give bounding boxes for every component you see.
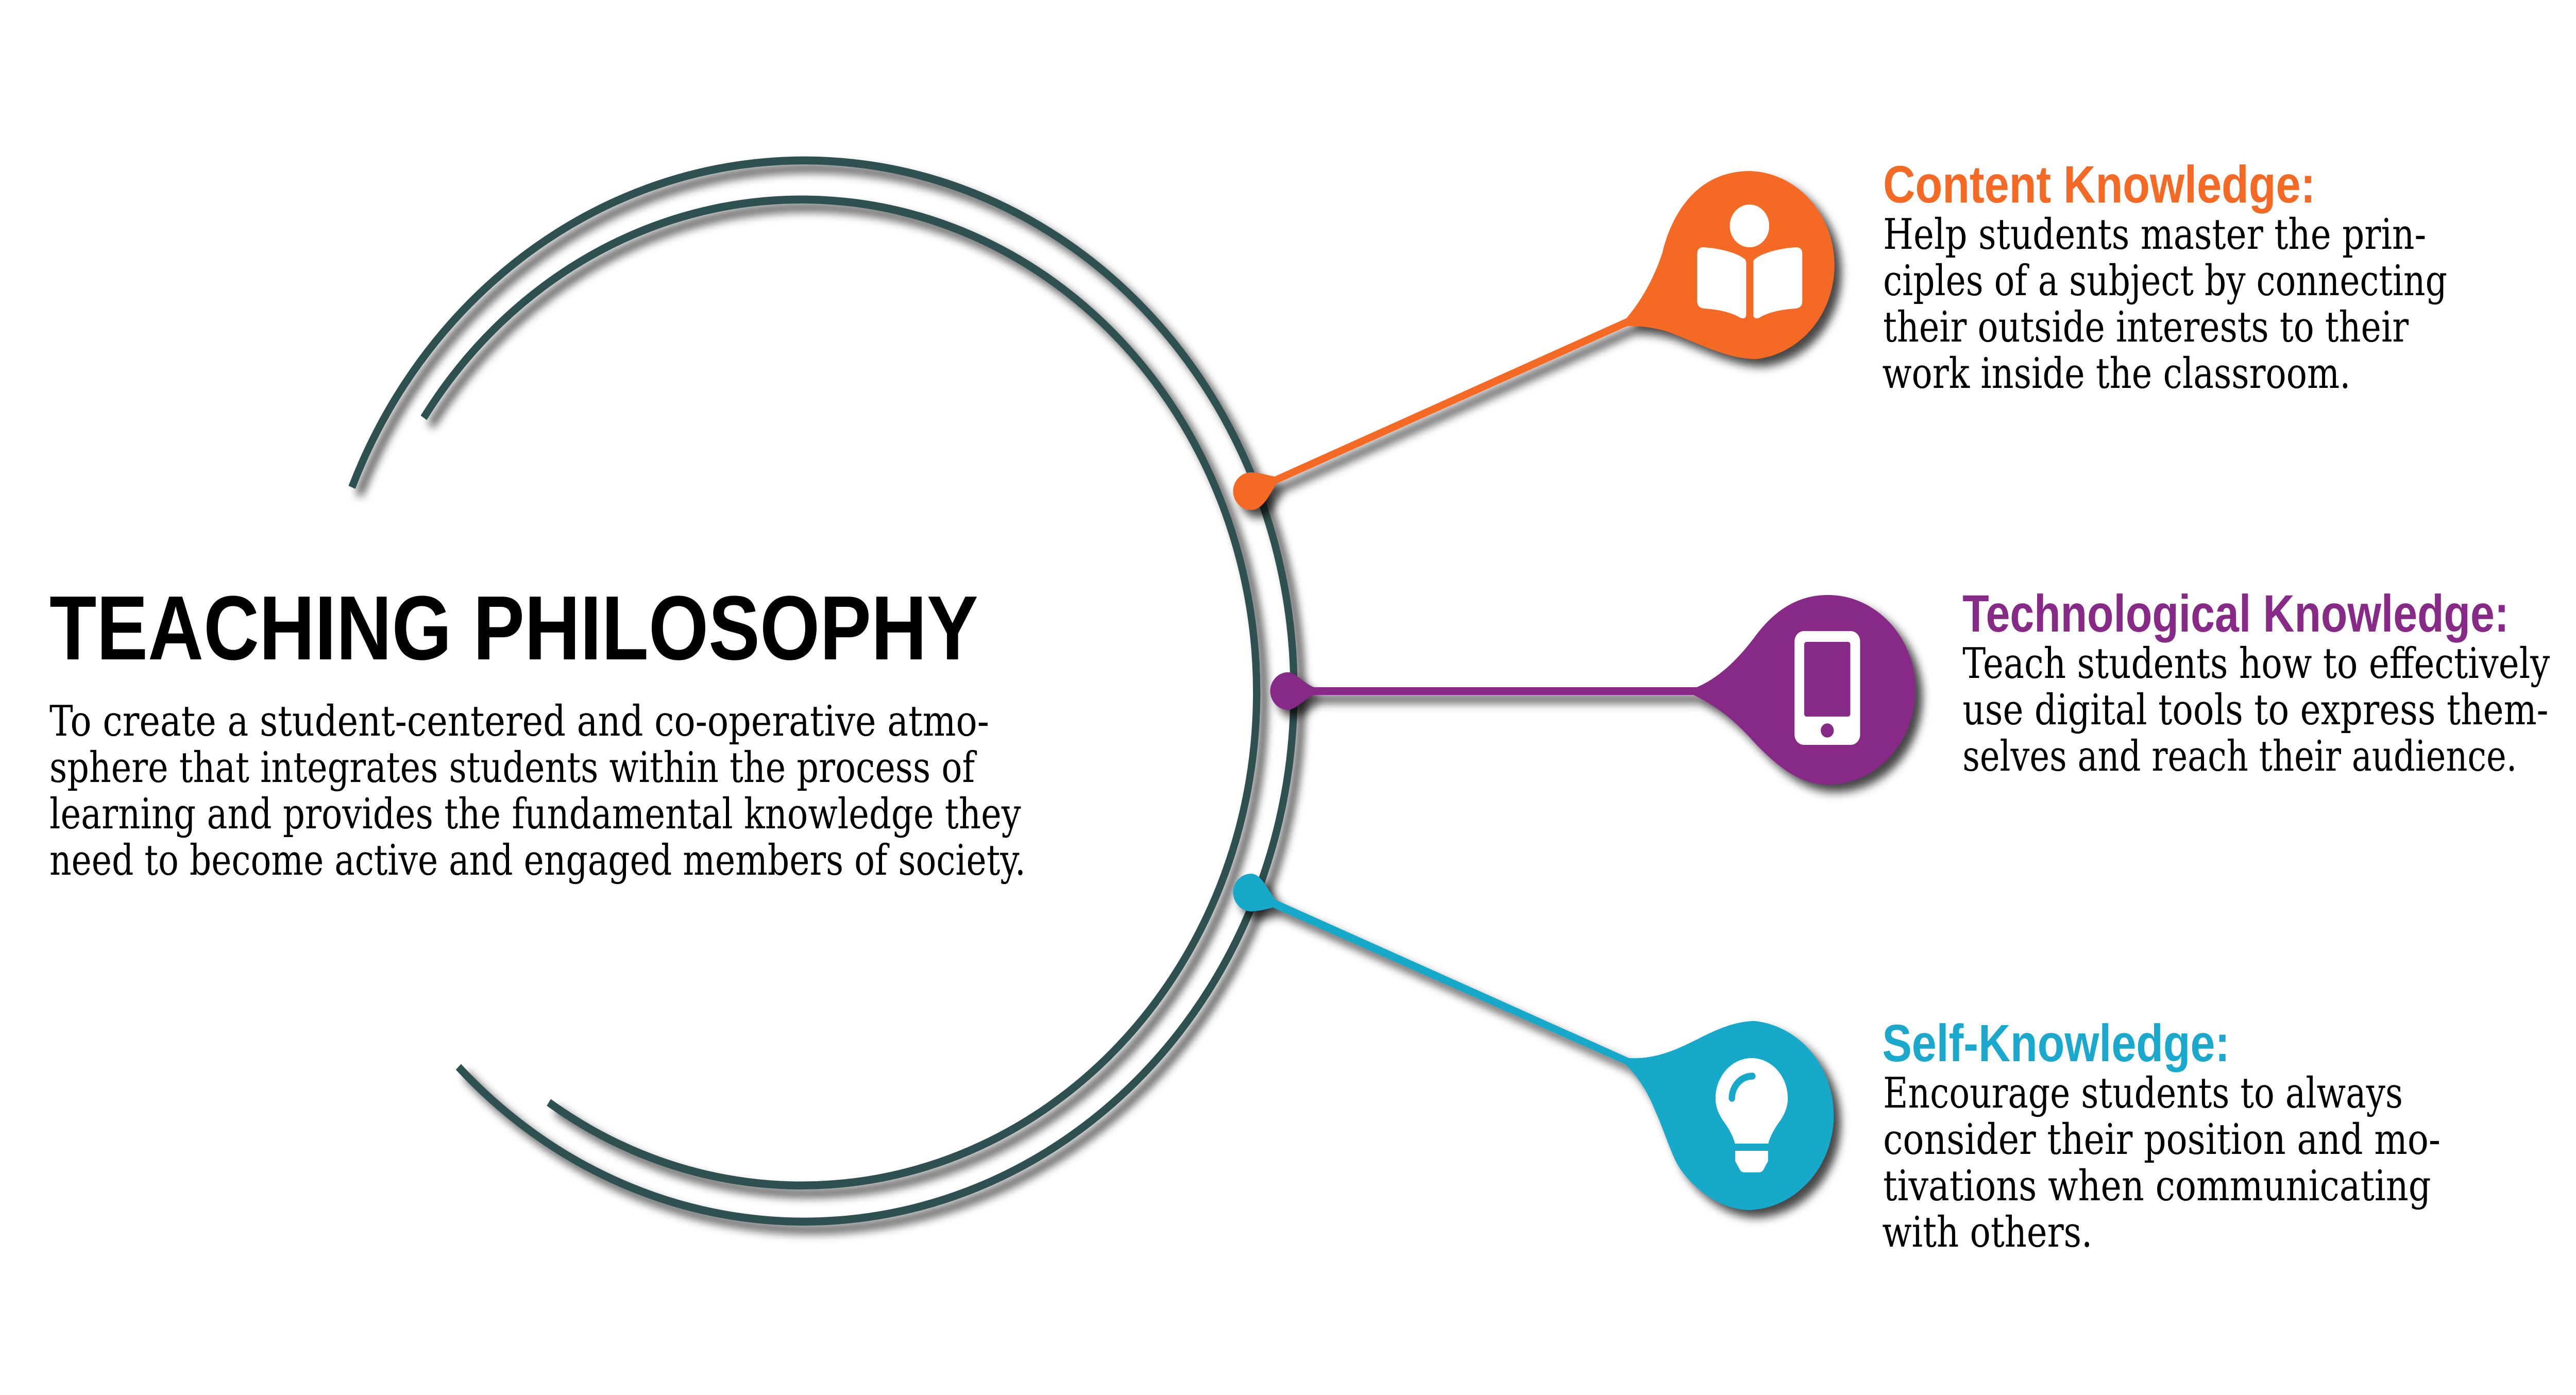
body: self-knowledge: consider their position and mo- [1883, 1115, 2441, 1164]
body: content knowledge [1882, 210, 2447, 398]
heading: self-knowledge: Self-Knowledge: [1882, 1014, 2230, 1073]
purple line [1313, 687, 1698, 695]
intro paragraph [49, 697, 1026, 885]
reader head [1730, 205, 1769, 247]
double ring [352, 160, 1294, 1221]
purple bubble [1693, 595, 1916, 785]
icon: light bulb [1716, 1058, 1788, 1172]
outer ring arc [352, 160, 1294, 1221]
text block: technological knowledge [1962, 584, 2550, 781]
bulb glass [1716, 1058, 1788, 1144]
phone body [1794, 631, 1860, 745]
text block: self-knowledge [1882, 1014, 2441, 1257]
body: technological knowledge [1962, 639, 2550, 781]
orange bubble [1626, 171, 1835, 359]
intro paragraph: need to become active and engaged members of society. [49, 836, 1026, 885]
body: content knowledge: ciples of a subject by connecting [1883, 257, 2447, 305]
text block: content knowledge [1882, 155, 2447, 398]
body: self-knowledge: with others. [1882, 1208, 2092, 1257]
phone button [1821, 723, 1834, 738]
title: TEACHING PHILOSOPHY [49, 577, 978, 679]
orange ring dot [1233, 472, 1277, 510]
book left page [1697, 247, 1746, 318]
teal bubble [1625, 1021, 1834, 1210]
intro paragraph: learning and provides the fundamental knowledge they [49, 790, 1021, 839]
body: content knowledge: their outside interests to their [1883, 303, 2409, 352]
body: self-knowledge: Encourage students to always [1883, 1069, 2403, 1118]
orange line [1274, 318, 1628, 484]
icon: reader with open book [1697, 205, 1802, 318]
intro paragraph: To create a student-centered and co-operative atmo- [49, 697, 989, 746]
purple ring dot [1270, 672, 1314, 710]
connector: content knowledge (orange) [1233, 171, 1835, 510]
body: self-knowledge [1882, 1069, 2441, 1257]
phone screen [1804, 642, 1850, 717]
heading: content knowledge: Content Knowledge: [1883, 155, 2315, 214]
icon: smartphone [1794, 631, 1860, 745]
book right page [1753, 247, 1802, 318]
bulb highlight [1732, 1076, 1752, 1098]
body: self-knowledge: tivations when communicating [1883, 1162, 2431, 1211]
body: content knowledge: work inside the classroom. [1882, 349, 2350, 398]
bulb cap [1735, 1151, 1768, 1172]
connector: technological knowledge (purple) [1270, 595, 1916, 785]
inner ring arc [423, 199, 1257, 1185]
heading: technological knowledge: Technological Knowledge: [1962, 584, 2509, 643]
body: content knowledge: Help students master the prin- [1883, 210, 2426, 259]
teal line [1274, 900, 1630, 1064]
intro paragraph: sphere that integrates students within the process of [49, 743, 977, 792]
connector: self-knowledge (teal) [1233, 874, 1834, 1210]
teal ring dot [1233, 874, 1277, 911]
